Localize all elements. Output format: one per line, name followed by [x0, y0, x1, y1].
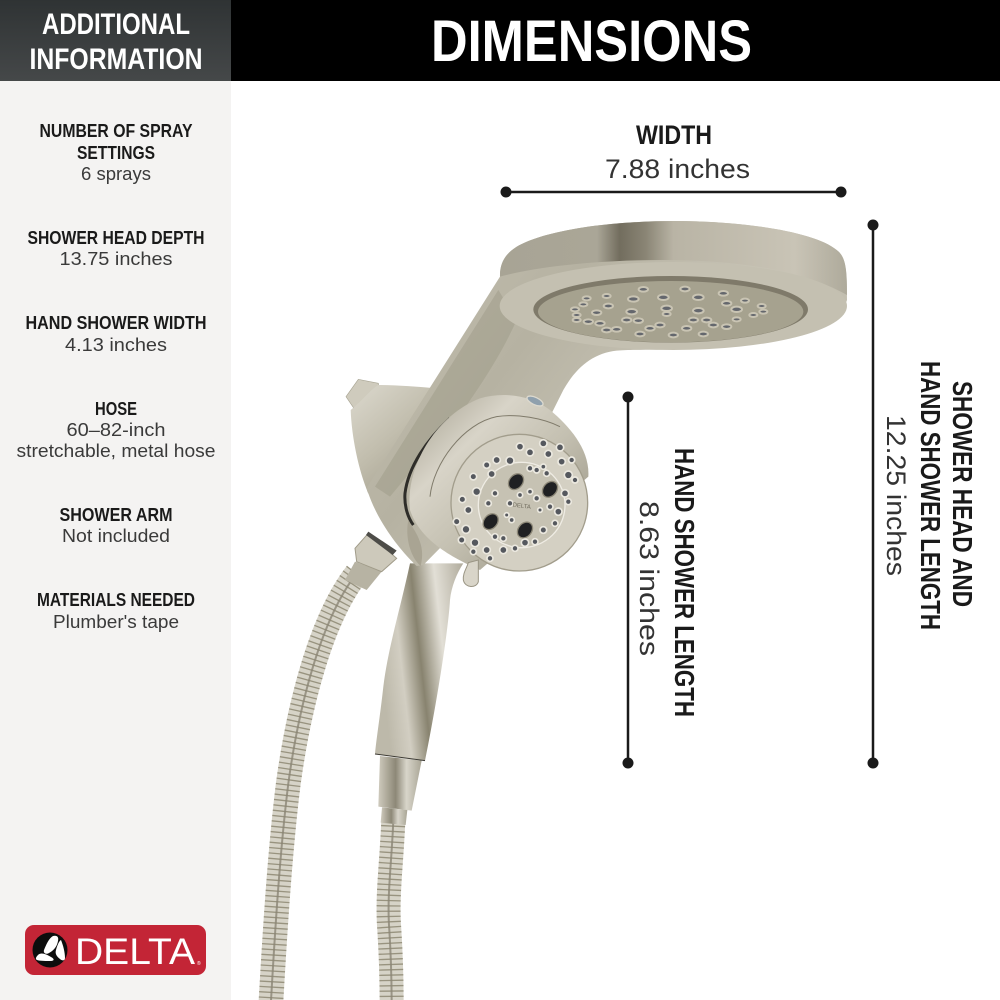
panel: additional information sidebar	[0, 0, 231, 1000]
width dimension: 7.88 inches	[605, 154, 750, 184]
rain head recess	[533, 276, 808, 343]
arm and rain head rim	[367, 221, 847, 566]
hose ferrule	[381, 807, 407, 825]
spec: shower head depth: SHOWER HEAD DEPTH	[28, 228, 204, 248]
spec: number of spray settings: SETTINGS	[77, 143, 155, 163]
width dimension: WIDTH	[636, 120, 712, 150]
hand shower head body	[409, 395, 588, 570]
hand shower spray nozzles	[453, 440, 578, 561]
spec: shower arm: Not included	[62, 526, 170, 546]
sidebar heading: ADDITIONAL	[42, 8, 190, 41]
hand shower body seam	[430, 416, 560, 497]
sidebar heading: INFORMATION	[30, 43, 202, 76]
spec: materials needed: MATERIALS NEEDED	[37, 590, 195, 610]
hand shower length dimension	[622, 392, 700, 768]
product: hoses and handle	[271, 533, 463, 1000]
arm central shaded facet	[375, 290, 517, 497]
width dimension	[500, 120, 846, 198]
hand shower length dimension: HAND SHOWER LENGTH	[669, 448, 700, 717]
rain head top rim	[500, 221, 847, 295]
hand shower inner ring	[478, 462, 565, 548]
spec: hand shower width	[26, 313, 206, 355]
gap shadow behind hand shower	[405, 418, 450, 525]
logo: Delta: DELTA	[75, 931, 195, 972]
spec: number of spray settings: 6 sprays	[81, 164, 151, 184]
mount nipple	[346, 379, 380, 410]
spec: hose: 60–82-inch	[66, 420, 166, 440]
shower head and hand shower length dimension: SHOWER HEAD AND	[947, 381, 978, 607]
sidebar heading	[0, 0, 231, 81]
mount cone	[351, 385, 437, 510]
spec: hand shower width: HAND SHOWER WIDTH	[26, 313, 206, 333]
hose to hand shower	[389, 820, 393, 1000]
release button	[526, 394, 544, 408]
logo: Delta: ®	[197, 960, 201, 967]
spec: number of spray settings	[40, 121, 192, 184]
hand shower handle	[375, 563, 463, 761]
rain head face	[538, 281, 803, 342]
handle collar	[378, 756, 422, 811]
spec: shower head depth	[28, 228, 204, 269]
arm clip tip	[407, 520, 422, 566]
hose to mount	[271, 573, 357, 1000]
spec: shower arm: SHOWER ARM	[60, 505, 172, 525]
dark seam	[375, 754, 425, 761]
hand shower trigger	[463, 560, 478, 586]
connector thread	[366, 532, 397, 555]
spec: hose: stretchable, metal hose	[16, 441, 216, 461]
spec: shower arm	[60, 505, 172, 546]
spec: hand shower width: 4.13 inches	[65, 335, 167, 355]
product: shower head assembly	[346, 221, 847, 586]
spec: materials needed: Plumber's tape	[53, 612, 179, 632]
spec: materials needed	[37, 590, 195, 632]
spec: shower head depth: 13.75 inches	[60, 249, 172, 269]
hand shower engraved brand: DELTA	[512, 502, 531, 511]
shower head and hand shower length dimension: 12.25 inches	[881, 415, 911, 576]
hand shower face	[451, 434, 588, 571]
hand shower large nozzles	[480, 471, 561, 541]
dimensions title bar	[231, 0, 1000, 81]
rain head lip	[500, 262, 847, 350]
logo: Delta	[25, 925, 206, 975]
hose connector neck	[345, 562, 382, 590]
rain head spray nozzles	[571, 287, 767, 337]
spec: hose	[16, 399, 216, 461]
hand shower length dimension: 8.63 inches	[634, 501, 664, 656]
hose connector nut	[355, 533, 397, 572]
spec: number of spray settings: NUMBER OF SPRAY	[40, 121, 192, 141]
shower head and hand shower length dimension: HAND SHOWER LENGTH	[915, 361, 946, 630]
dimensions title bar: DIMENSIONS	[431, 9, 752, 74]
spec: hose: HOSE	[95, 399, 137, 419]
shower head and hand shower length dimension	[868, 220, 978, 768]
